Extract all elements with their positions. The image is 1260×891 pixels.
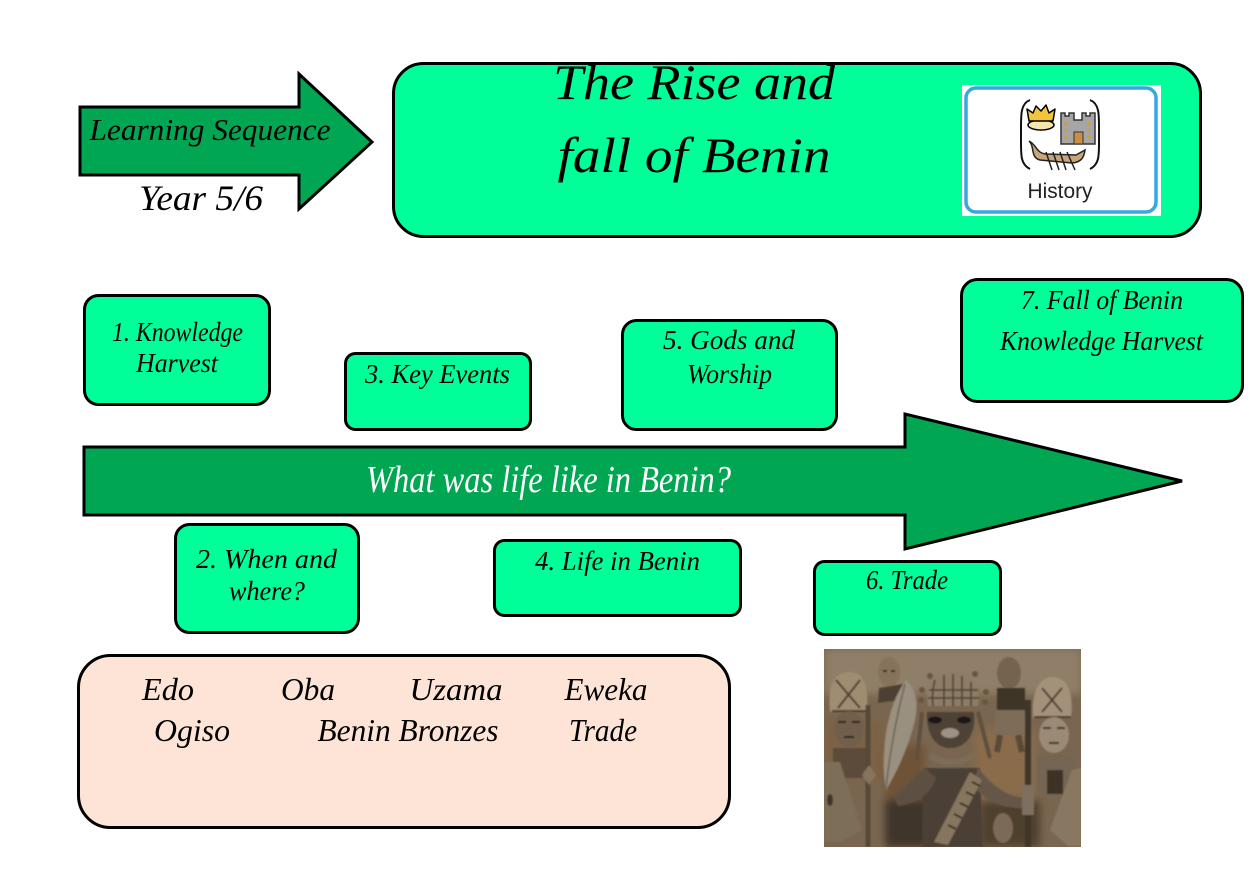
icon: castle [1061, 113, 1095, 144]
label: year group: Year 5/6 [139, 178, 263, 218]
title panel [394, 54, 1200, 236]
box: lesson 2 [176, 524, 358, 632]
face [927, 712, 974, 748]
headdress [927, 692, 979, 706]
box: lesson 2: where? [229, 576, 305, 606]
panel: vocabulary: Uzama [410, 671, 502, 707]
arms [893, 768, 936, 806]
headdress strands [917, 712, 990, 760]
panel: vocabulary: Benin Bronzes [318, 712, 498, 748]
top left small figure [878, 657, 900, 687]
box: lesson 4: 4. Life in Benin [535, 546, 700, 576]
right attendant [1033, 677, 1072, 718]
box: lesson 2: 2. When and [196, 544, 338, 574]
box: lesson 6: 6. Trade [866, 565, 948, 595]
lower face [993, 813, 1013, 843]
icon: boat [1029, 141, 1085, 170]
box: lesson 7 [962, 280, 1242, 402]
bandolier [934, 772, 982, 845]
image: Benin bronze plaque [824, 649, 1081, 847]
sword [884, 680, 917, 790]
panel: vocabulary: Trade [569, 712, 637, 748]
left attendant [829, 672, 867, 712]
top right small figure [997, 657, 1021, 689]
panel: vocabulary [78, 656, 730, 828]
box: lesson 3: 3. Key Events [364, 359, 510, 389]
panel: vocabulary: Eweka [564, 671, 648, 707]
title line 1: The Rise and [553, 54, 836, 110]
panel: vocabulary: Ogiso [154, 712, 230, 748]
label: learning sequence: Learning Sequence [88, 112, 331, 147]
shields [824, 762, 862, 842]
box: lesson 1: Harvest [135, 348, 219, 378]
box: lesson 5: 5. Gods and [663, 325, 795, 355]
panel: vocabulary: Edo [141, 671, 194, 707]
box: lesson 6 [814, 562, 1000, 634]
arrow: learning sequence [80, 74, 372, 209]
title line 2: fall of Benin [558, 127, 830, 183]
box: lesson 4 [494, 540, 740, 616]
icon: brackets [1021, 100, 1099, 169]
box: lesson 7: Knowledge Harvest [999, 326, 1204, 356]
staffs [866, 705, 870, 847]
timeline label: What was life like in Benin? [366, 459, 731, 501]
panel: vocabulary: Oba [281, 671, 335, 707]
box: lesson 7: 7. Fall of Benin [1021, 285, 1183, 315]
arrow: timeline [84, 414, 1182, 549]
icon: history symbol card [962, 85, 1161, 216]
torso [922, 768, 983, 847]
box: lesson 3 [346, 354, 530, 430]
box: lesson 1 [84, 296, 270, 404]
icon: crown [1027, 105, 1055, 130]
label: history: History [1028, 180, 1093, 203]
box: lesson 1: 1. Knowledge [112, 317, 243, 347]
box: lesson 5 [622, 320, 836, 430]
box: lesson 5: Worship [687, 359, 772, 389]
